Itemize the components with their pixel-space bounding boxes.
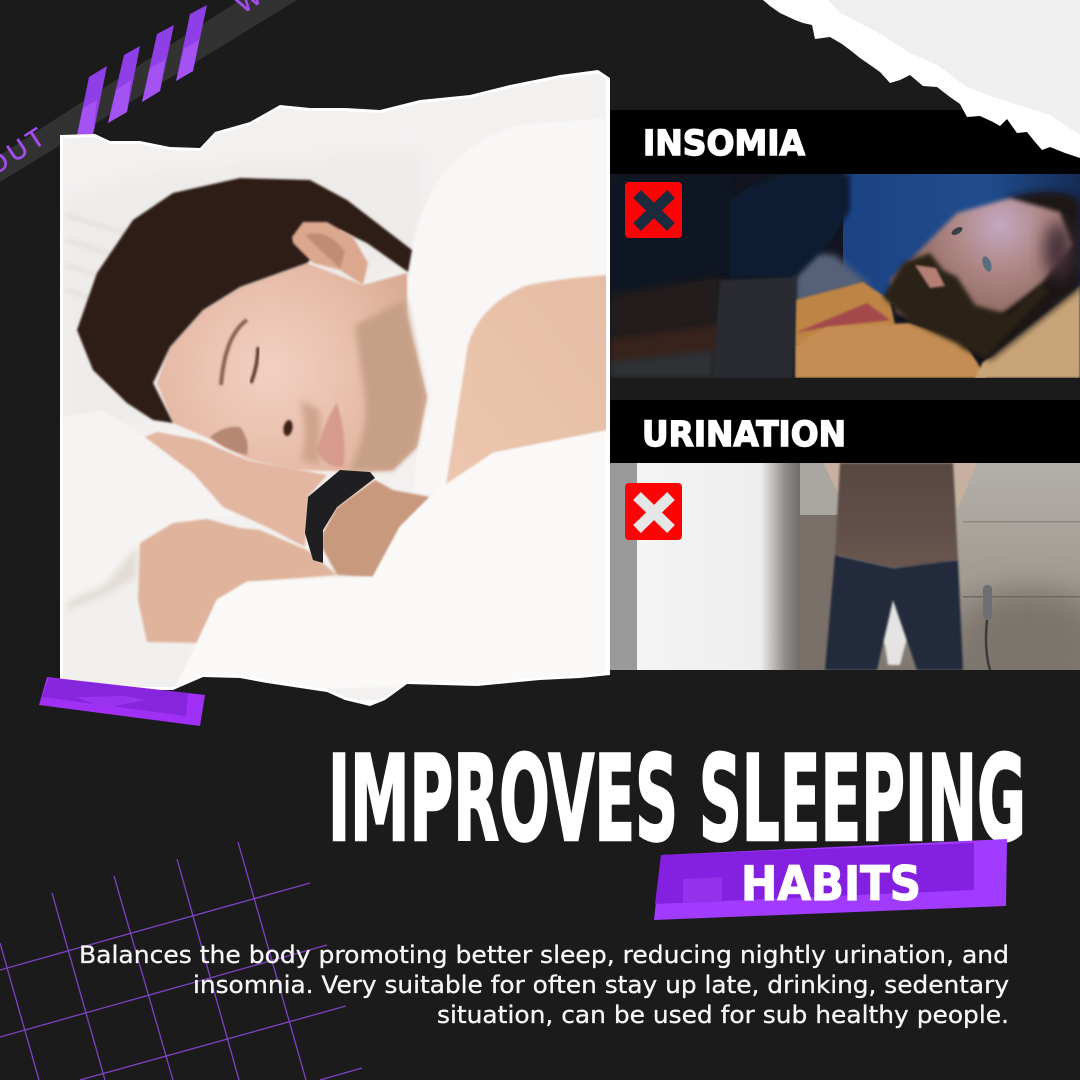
blanket [173,430,610,692]
body text: insomnia. Very suitable for often stay up late, drinking, sedentary [193,971,1009,999]
wristband [305,470,375,563]
ear [292,222,368,285]
heading band: insomnia: INSOMIA [643,124,805,164]
pillow low left [72,412,120,438]
photo: man sleeping on white pillow [60,70,610,706]
heading band: urination [610,400,1080,463]
upper arm [445,275,610,492]
face [157,263,427,472]
diagonal ribbon with text [0,0,297,182]
hair [77,178,412,423]
body text: Balances the body promoting better sleep, reducing nightly urination, and [79,941,1009,969]
back pillow [63,150,420,450]
banner: habits [654,839,1007,920]
hand [145,432,327,547]
purple grid [0,842,362,1080]
bed sheet [63,577,197,690]
lower arm [138,519,337,643]
heading band: urination: URINATION [642,415,846,455]
eyes nose mouth [221,320,247,385]
heading band: insomnia [610,110,1080,174]
panel: urination [610,400,1080,690]
purple tape [39,677,205,726]
photo: man at urinal [610,463,1080,690]
icon: red x [625,182,682,238]
purple stripes [77,5,207,135]
icon: red x [625,483,682,540]
torn paper top right [763,0,1080,158]
body text [79,941,1009,1029]
shirt [412,220,422,264]
forearm [322,480,430,577]
stubble [350,300,425,470]
photo: man with phone in bed [610,174,1080,378]
banner: habits: HABITS [741,857,921,912]
panel: insomnia [610,110,1080,378]
body text: situation, can be used for sub healthy people. [437,1001,1009,1029]
